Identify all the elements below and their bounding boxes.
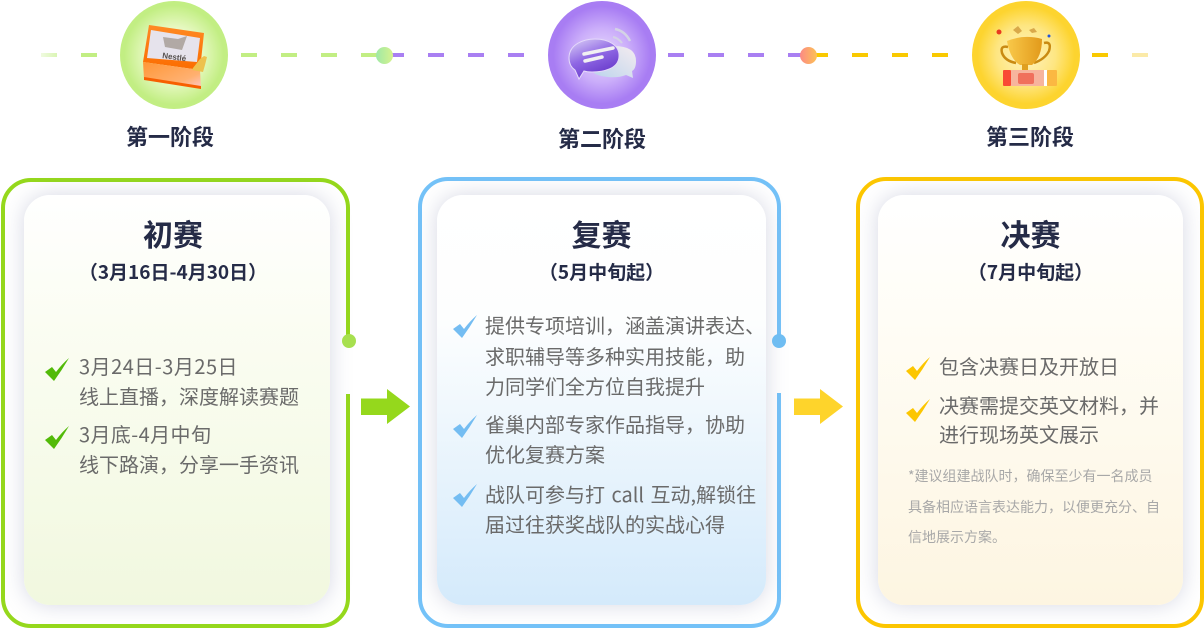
item text: livestream: 3月24日-3月25日	[79, 351, 238, 380]
panel: preliminary round	[1, 178, 356, 628]
check icon	[45, 426, 69, 449]
item text: english materials: 决赛需提交英文材料，并	[939, 390, 1159, 419]
heading: phase three: 第三阶段	[986, 120, 1074, 152]
panel: final: 信地展示方案。	[908, 527, 1006, 547]
panel: final: 进行现场英文展示	[939, 419, 1099, 448]
panel: preliminary round: 线上直播，深度解读赛题	[79, 381, 299, 410]
check icon	[45, 358, 69, 381]
date: semifinal: （5月中旬起）	[539, 258, 664, 285]
heading: phase one: 第一阶段	[126, 120, 214, 152]
arrow: yellow	[794, 389, 843, 424]
heading: phase two: 第二阶段	[558, 122, 646, 154]
title: final: 决赛	[1000, 211, 1060, 255]
panel: semifinal: 力同学们全方位自我提升	[485, 371, 705, 400]
check icon	[906, 357, 930, 380]
check icon	[453, 484, 477, 507]
icon: phase one laptop	[120, 1, 228, 109]
icon: phase three trophy	[972, 1, 1080, 109]
connector dot: blue	[772, 334, 786, 348]
title: preliminary: 初赛	[143, 211, 203, 255]
panel: semifinal: 届过往获奖战队的实战心得	[485, 509, 725, 538]
note: *建议组建战队时，确保至少有一名成员	[908, 466, 1153, 486]
panel: semifinal	[418, 177, 786, 628]
logo wordmark: Nestlé	[162, 51, 187, 63]
date range: （3月16日-4月30日）	[79, 258, 267, 285]
panel: final	[856, 177, 1204, 628]
timeline dashes	[41, 53, 1148, 57]
arrow: green	[361, 389, 410, 424]
panel: semifinal: 求职辅导等多种实用技能，助	[485, 341, 745, 370]
item text: expert guidance: 雀巢内部专家作品指导，协助	[485, 409, 745, 438]
item text: roadshow: 3月底-4月中旬	[79, 419, 211, 448]
item text: training: 提供专项培训，涵盖演讲表达、	[485, 310, 765, 339]
timeline node: orange	[800, 47, 817, 64]
check icon	[453, 315, 477, 338]
date: final: （7月中旬起）	[968, 258, 1093, 285]
connector dot: green	[342, 334, 356, 348]
item text: final day: 包含决赛日及开放日	[939, 351, 1119, 380]
panel: semifinal: 优化复赛方案	[485, 439, 605, 468]
panel: final: 具备相应语言表达能力，以便更充分、自	[908, 497, 1160, 517]
item text: call interaction: 战队可参与打 call 互动,解锁往	[485, 479, 756, 508]
timeline node: green	[376, 47, 393, 64]
check icon	[906, 399, 930, 422]
check icon	[453, 415, 477, 438]
panel: preliminary round: 线下路演，分享一手资讯	[79, 449, 299, 478]
icon: phase two chat bubbles	[548, 1, 656, 109]
title: semifinal: 复赛	[572, 211, 632, 255]
